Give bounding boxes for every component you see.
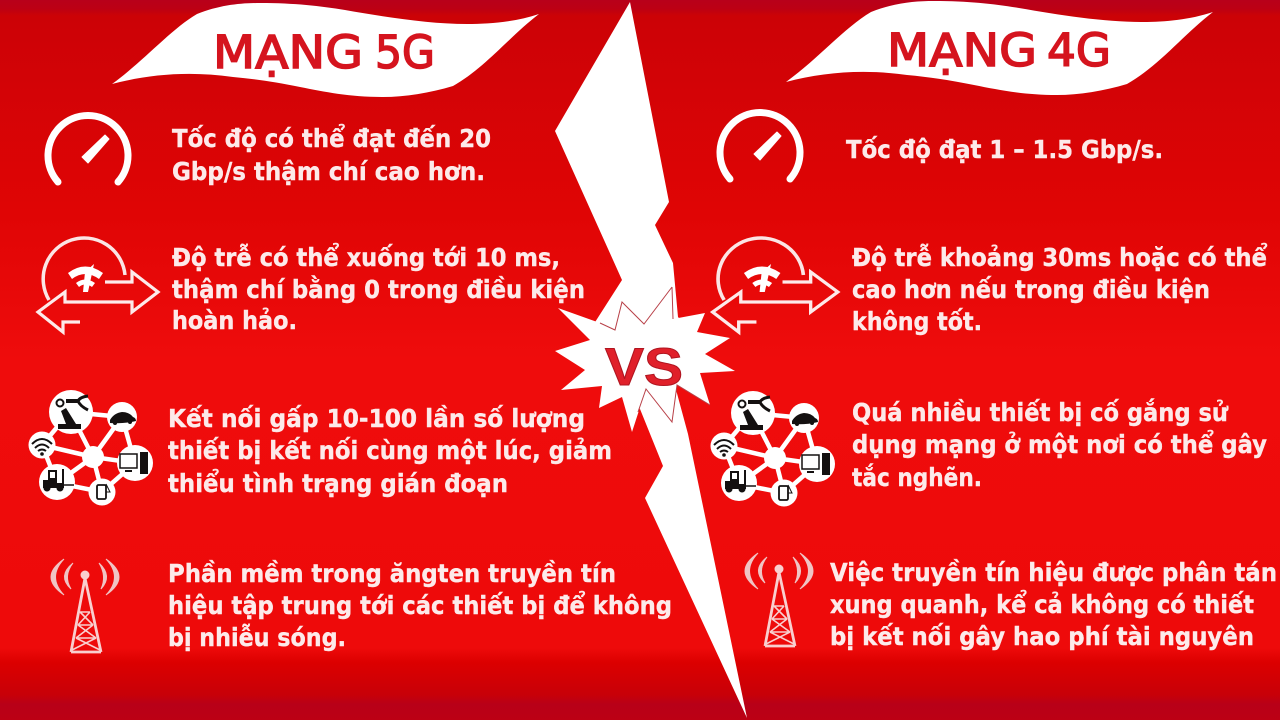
connections row (28, 390, 612, 506)
heading: MẠNG (213, 26, 363, 79)
icon: device network (710, 391, 835, 506)
latency text: Độ trễ có thể xuống tới 10 ms, (172, 242, 560, 272)
VS starburst badge (555, 287, 735, 432)
VS text: VS (605, 338, 683, 397)
antenna row (745, 553, 1277, 651)
antenna text: Phần mềm trong ăngten truyền tín (168, 559, 616, 588)
icon: speedometer (48, 116, 128, 182)
latency text: thậm chí bằng 0 trong điều kiện (172, 275, 585, 304)
icon: device network (28, 390, 153, 506)
icon: latency arrows (38, 238, 158, 332)
speed row (48, 116, 491, 186)
connections text: Kết nối gấp 10-100 lần số lượng (168, 404, 585, 433)
connections text: thiết bị kết nối cùng một lúc, giảm (168, 436, 612, 465)
panel: 4G (710, 1, 1277, 651)
antenna text: bị nhiễu sóng. (168, 623, 346, 652)
title banner: Mạng 4G (786, 1, 1213, 95)
speed row (720, 113, 1163, 179)
latency row (713, 238, 1268, 336)
heading: 5G (375, 26, 435, 79)
panel: 5G (28, 3, 672, 652)
latency row (38, 238, 585, 335)
speed text: Gbp/s thậm chí cao hơn. (172, 157, 485, 186)
heading: MẠNG (887, 24, 1037, 77)
banner shape (112, 3, 539, 97)
connections text: thiểu tình trạng gián đoạn (168, 468, 508, 498)
lightning bolt divider (555, 2, 747, 718)
antenna text: hiệu tập trung tới các thiết bị để không (168, 590, 672, 620)
connections row (710, 391, 1267, 506)
banner shape (786, 1, 1213, 95)
icon: antenna tower (745, 553, 813, 646)
latency text: hoàn hảo. (172, 306, 297, 335)
connections text: Quá nhiều thiết bị cố gắng sử (852, 398, 1229, 427)
connections text: tắc nghẽn. (852, 463, 982, 492)
title banner: Mạng 5G (112, 3, 539, 97)
speed text: Tốc độ đạt 1 – 1.5 Gbp/s. (846, 135, 1163, 164)
latency text: cao hơn nếu trong điều kiện (852, 275, 1210, 304)
antenna row (51, 559, 672, 652)
speed text: Tốc độ có thể đạt đến 20 (172, 123, 491, 153)
icon: speedometer (720, 113, 800, 179)
starburst (555, 287, 735, 432)
latency text: không tốt. (852, 307, 982, 336)
icon: antenna tower (51, 559, 119, 652)
heading: 4G (1047, 24, 1111, 77)
icon: latency arrows (713, 238, 838, 332)
